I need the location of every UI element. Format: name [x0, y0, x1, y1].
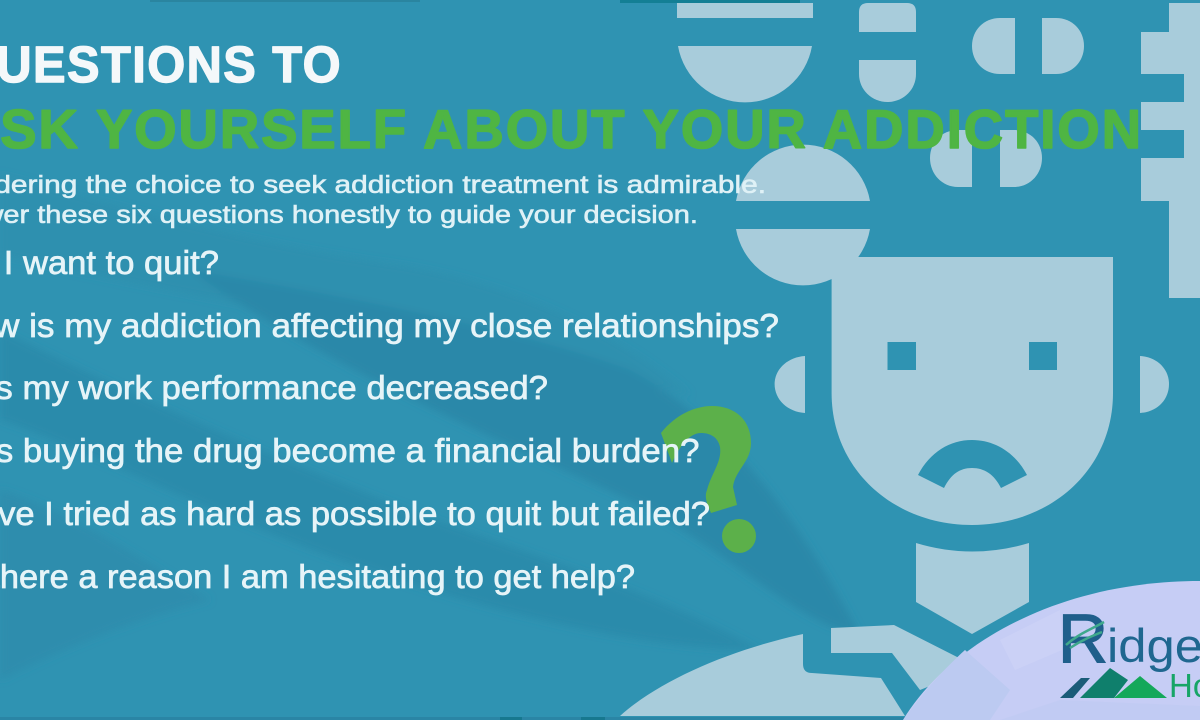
- person collar: [831, 625, 965, 690]
- person eyes: [888, 342, 1057, 370]
- intro text: [0, 171, 766, 229]
- icon: floating dollar and pill shapes: [677, 3, 1200, 298]
- icon: green question mark: [661, 406, 756, 553]
- logo badge: [903, 581, 1200, 720]
- title: [0, 36, 1143, 160]
- logo wordmark: R: [1058, 600, 1108, 677]
- person ears: [775, 356, 1169, 413]
- logo wordmark: idge: [1107, 619, 1200, 672]
- question list: [0, 244, 779, 595]
- person shoulders: [620, 634, 905, 716]
- icon: sad person illustration: [620, 145, 1169, 716]
- person hair bun: [736, 145, 870, 285]
- logo mountains: [1060, 668, 1167, 698]
- person neck: [916, 543, 1029, 634]
- person mouth: [918, 440, 1027, 488]
- logo wordmark: [1058, 600, 1200, 677]
- person head: [832, 257, 1113, 525]
